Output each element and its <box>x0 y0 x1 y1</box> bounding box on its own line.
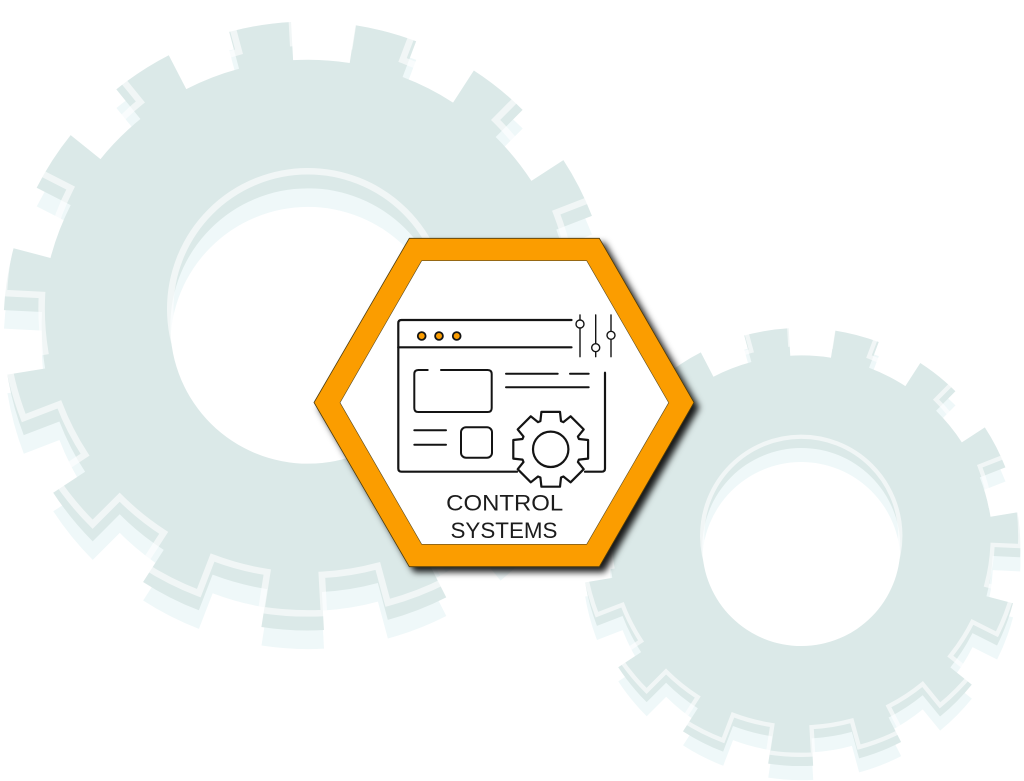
hexagon white interior <box>340 261 669 544</box>
label: control systems <box>446 490 563 543</box>
small square <box>461 427 492 458</box>
small gear: light outline <box>581 316 1021 756</box>
content panel <box>414 370 492 412</box>
hexagon orange frame <box>314 238 694 567</box>
large gear: light outline <box>3 4 614 614</box>
hexagon badge <box>314 238 694 567</box>
small gear: main body <box>581 327 1022 767</box>
title bar dots <box>418 332 461 340</box>
large gear: main body <box>3 21 614 632</box>
large background gear <box>3 4 614 650</box>
title bar divider <box>398 346 572 348</box>
large gear: pale offset layer <box>3 39 614 650</box>
window frame <box>398 320 605 472</box>
text lines left <box>414 430 446 445</box>
small gear: pale offset layer <box>582 341 1022 781</box>
small background gear <box>581 316 1022 781</box>
text lines right <box>506 374 589 387</box>
icon: cog <box>513 412 588 487</box>
label: control systems: CONTROL <box>446 490 563 516</box>
label: control systems: SYSTEMS <box>450 518 558 543</box>
slider controls <box>576 315 615 357</box>
icon: control panel window <box>398 315 615 487</box>
